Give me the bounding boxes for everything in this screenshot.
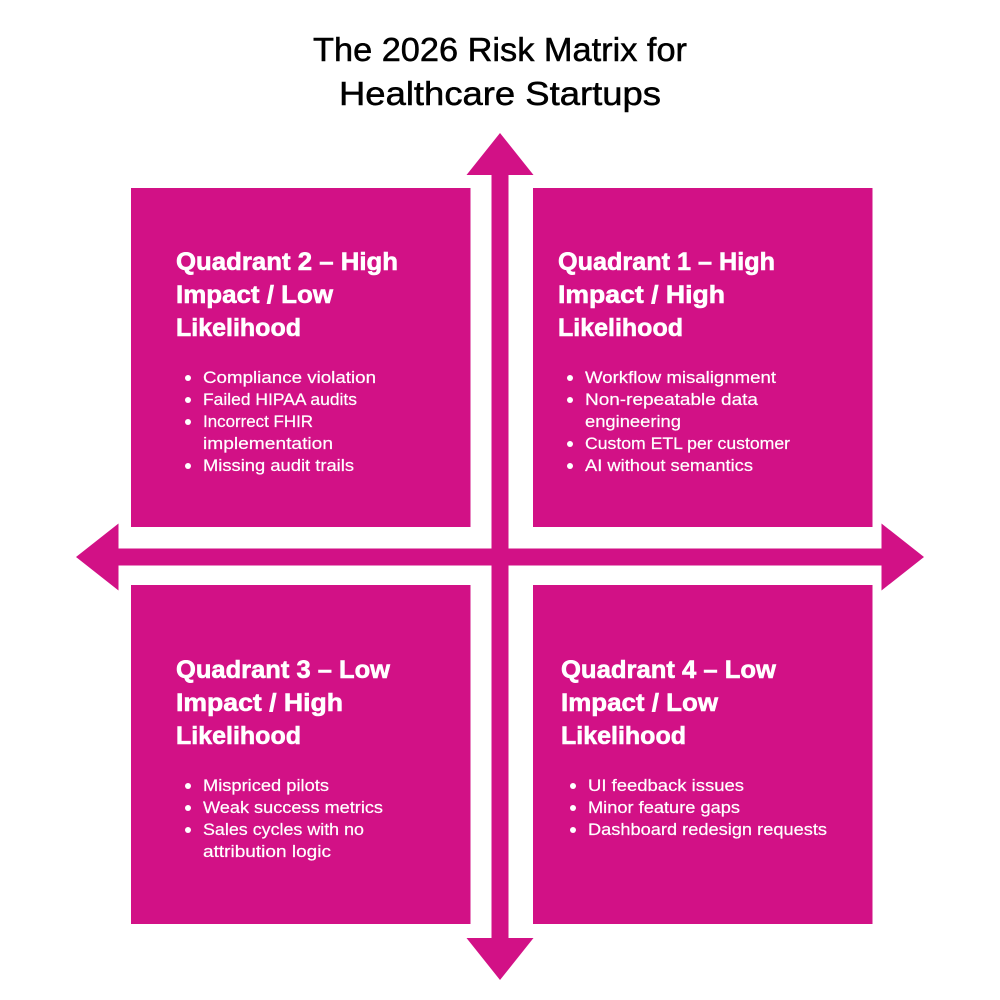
title: The 2026 Risk Matrix for	[313, 31, 687, 68]
list: quadrant 3 risks: attribution logic	[203, 843, 331, 861]
list: quadrant 3 risks: Mispriced pilots	[203, 777, 329, 795]
list: quadrant 4 risks: Minor feature gaps	[588, 799, 740, 817]
list: quadrant 3 risks: Weak success metrics	[203, 799, 383, 817]
heading: quadrant 1: Likelihood	[558, 314, 683, 342]
list: quadrant 1 risks: Non-repeatable data	[585, 391, 759, 409]
title	[313, 31, 687, 112]
list: quadrant 2 risks	[185, 369, 376, 475]
heading: quadrant 1: Quadrant 1 – High	[558, 248, 775, 276]
list: quadrant 3 risks	[185, 777, 383, 861]
list: quadrant 1 risks: Custom ETL per customer	[585, 435, 791, 453]
list: quadrant 2 risks: Compliance violation	[203, 369, 376, 387]
heading: quadrant 1: Impact / High	[558, 281, 725, 309]
heading: quadrant 3: Impact / High	[176, 689, 343, 717]
heading: quadrant 3	[176, 656, 391, 750]
list: quadrant 2 risks: Missing audit trails	[203, 457, 354, 475]
list: quadrant 4 risks: UI feedback issues	[588, 777, 744, 795]
arrow: horizontal axis	[76, 524, 924, 590]
list: quadrant 1 risks: engineering	[585, 413, 681, 431]
list: quadrant 3 risks: Sales cycles with no	[203, 821, 364, 839]
heading: quadrant 2	[176, 248, 398, 342]
panel: quadrant 2	[131, 188, 470, 527]
title: Healthcare Startups	[339, 75, 661, 112]
heading: quadrant 4: Impact / Low	[561, 689, 719, 717]
arrow: vertical axis	[466, 133, 534, 980]
heading: quadrant 4: Quadrant 4 – Low	[561, 656, 777, 684]
heading: quadrant 2: Likelihood	[176, 314, 301, 342]
heading: quadrant 3: Quadrant 3 – Low	[176, 656, 391, 684]
heading: quadrant 2: Quadrant 2 – High	[176, 248, 398, 276]
panel: quadrant 1	[533, 188, 872, 527]
heading: quadrant 1	[558, 248, 775, 342]
panel: quadrant 3	[131, 585, 470, 924]
heading: quadrant 4: Likelihood	[561, 722, 686, 750]
list: quadrant 1 risks	[567, 369, 791, 475]
heading: quadrant 3: Likelihood	[176, 722, 301, 750]
list: quadrant 2 risks: implementation	[203, 435, 333, 453]
heading: quadrant 4	[561, 656, 777, 750]
list: quadrant 4 risks	[570, 777, 827, 839]
list: quadrant 2 risks: Incorrect FHIR	[203, 413, 313, 431]
list: quadrant 1 risks: AI without semantics	[585, 457, 753, 475]
list: quadrant 2 risks: Failed HIPAA audits	[203, 391, 357, 409]
panel: quadrant 4	[533, 585, 872, 924]
heading: quadrant 2: Impact / Low	[176, 281, 334, 309]
list: quadrant 1 risks: Workflow misalignment	[585, 369, 776, 387]
list: quadrant 4 risks: Dashboard redesign requests	[588, 821, 827, 839]
